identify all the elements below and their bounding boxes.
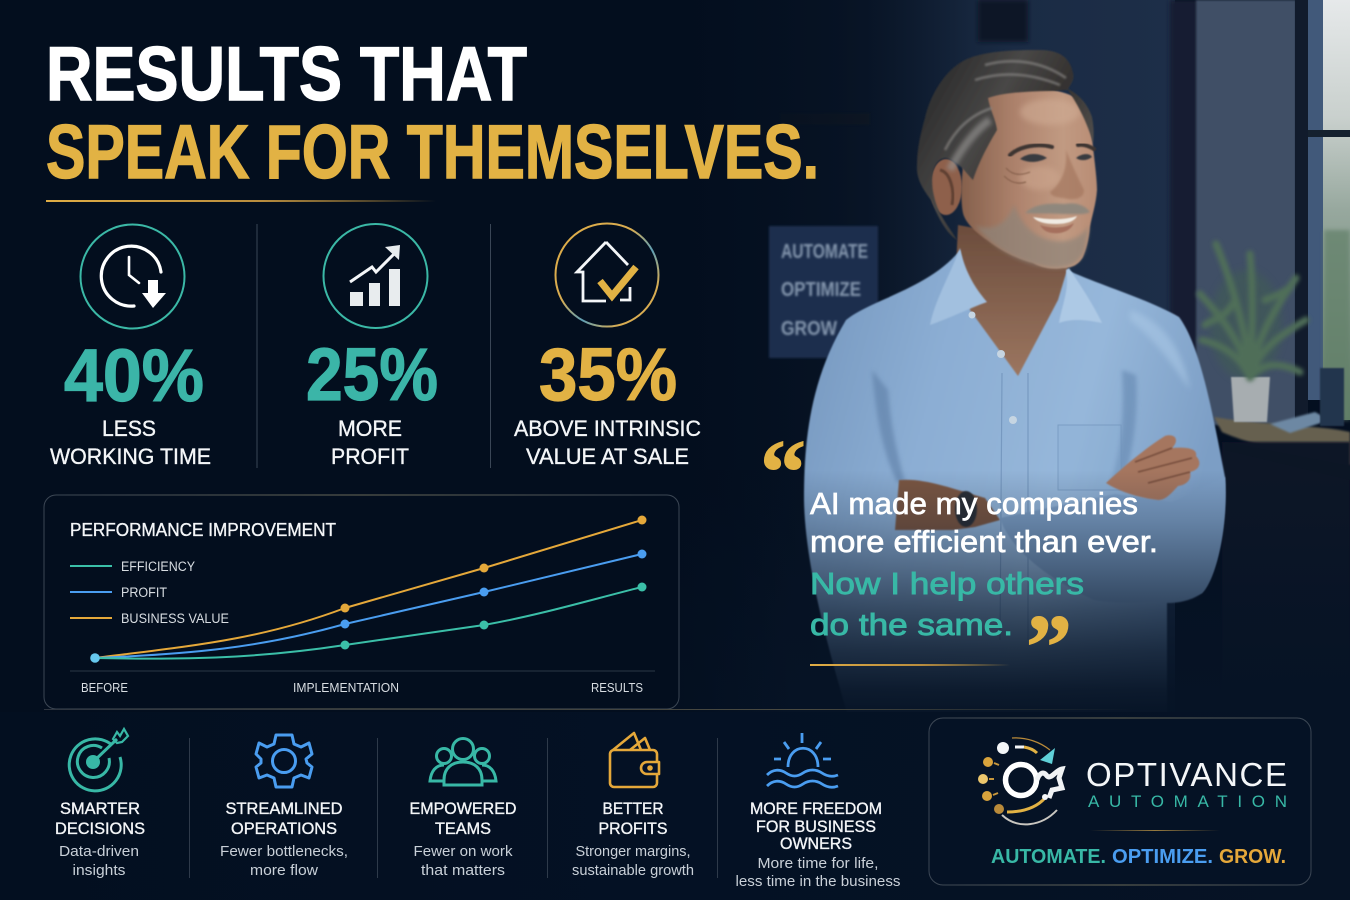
face	[961, 88, 1097, 269]
benefit: empowered teams	[410, 738, 516, 879]
shirt body	[804, 250, 1225, 722]
stat: 40% less working time: 40%	[64, 334, 204, 417]
logo mark	[978, 738, 1062, 824]
icon: house with check	[577, 242, 636, 301]
wall sign: AUTOMATE	[781, 241, 868, 263]
divider	[189, 738, 190, 878]
stat: 35% above intrinsic value: 35%	[539, 333, 677, 416]
benefit: smarter decisions: Data-driven	[59, 844, 139, 860]
opening quote mark: “	[760, 421, 806, 523]
forearm skin	[895, 480, 1000, 530]
stat divider	[256, 224, 258, 468]
panel: Optivance logo	[929, 718, 1311, 885]
stat: 35% above intrinsic value: ABOVE INTRINSIC	[514, 416, 701, 441]
closing quote mark: ”	[1026, 596, 1072, 698]
stat: 25% more profit: MORE	[338, 416, 402, 441]
collar left	[930, 248, 987, 325]
benefit: more freedom: FOR BUSINESS	[756, 817, 876, 836]
quote block	[760, 421, 1158, 698]
tagline	[991, 846, 1286, 868]
stat: 40% less working time: LESS	[102, 416, 156, 441]
benefit: more freedom: OWNERS	[780, 834, 852, 853]
tagline: AUTOMATE.	[991, 846, 1106, 868]
quote underline	[810, 664, 1010, 666]
eyebrows	[1010, 145, 1094, 155]
moustache	[1025, 203, 1090, 214]
portrait of man	[804, 50, 1225, 722]
wall sign: OPTIMIZE	[781, 279, 861, 301]
chart title: PERFORMANCE IMPROVEMENT	[70, 520, 336, 540]
benefit: more freedom: More time for life,	[758, 856, 878, 872]
ear	[930, 159, 962, 215]
line: business value	[95, 516, 646, 658]
benefit: smarter decisions: insights	[72, 863, 126, 879]
benefit: empowered teams: TEAMS	[435, 819, 491, 838]
right arm shadow	[1112, 370, 1137, 480]
benefit: better profits: Stronger margins,	[576, 844, 690, 860]
hair	[917, 50, 1094, 240]
placket	[1000, 373, 1028, 640]
eyes	[1020, 154, 1092, 162]
lower lip	[1040, 223, 1074, 233]
benefit: empowered teams: that matters	[421, 863, 505, 879]
axis labels: BEFORE	[81, 680, 128, 695]
benefit: more freedom	[736, 733, 900, 890]
horizontal separator	[44, 709, 1134, 710]
wall sign: GROW	[781, 318, 837, 340]
watch	[955, 491, 977, 527]
benefit: better profits	[572, 733, 694, 879]
smile	[1033, 216, 1077, 224]
panel: performance improvement chart	[44, 495, 679, 709]
quote text: AI made my companies	[810, 486, 1138, 521]
tagline: GROW.	[1219, 846, 1286, 868]
icon: people	[430, 738, 496, 785]
left edge blend	[640, 470, 790, 720]
icon: wallet	[610, 733, 659, 787]
stat: 40% less working time: WORKING TIME	[50, 444, 211, 469]
quote text: Now I help others	[810, 566, 1084, 601]
benefit: more freedom: less time in the business	[736, 874, 900, 890]
divider	[377, 738, 378, 878]
benefit: smarter decisions: SMARTER	[60, 799, 140, 818]
stat: 35% above intrinsic value: VALUE AT SALE	[526, 444, 689, 469]
quote text: do the same.	[810, 607, 1013, 642]
shoulder highlight	[1130, 310, 1190, 390]
benefit: better profits: sustainable growth	[572, 863, 694, 879]
axis labels	[81, 680, 643, 695]
left arm inner shadow	[872, 370, 905, 482]
benefit: more freedom: MORE FREEDOM	[750, 799, 882, 818]
logo divider	[1090, 830, 1220, 831]
title	[46, 32, 819, 195]
benefit: streamlined operations: OPERATIONS	[231, 819, 337, 838]
chart legend	[70, 559, 229, 626]
wall sign	[769, 226, 878, 358]
stat: 25% more profit	[306, 224, 438, 469]
axis labels: IMPLEMENTATION	[293, 680, 399, 695]
benefit: smarter decisions: DECISIONS	[55, 819, 145, 838]
neck	[955, 225, 1069, 378]
stat: 35% above intrinsic value	[514, 224, 701, 469]
collar right	[1059, 268, 1102, 323]
stat: 40% less working time	[50, 224, 211, 469]
chart legend: PROFIT	[121, 585, 167, 600]
panel: Optivance logo: AUTOMATION	[1088, 792, 1287, 811]
nose shadow	[1050, 150, 1084, 199]
brand name: OPTIVANCE	[1086, 756, 1287, 793]
shelf	[780, 113, 870, 125]
divider	[547, 738, 548, 878]
plant and desk	[1200, 244, 1350, 702]
title: SPEAK FOR THEMSELVES.	[46, 110, 819, 195]
shirt pocket	[1058, 425, 1121, 490]
hand	[1106, 435, 1199, 500]
beard stubble	[975, 204, 1089, 268]
quote text: more efficient than ever.	[810, 524, 1158, 559]
chart legend: BUSINESS VALUE	[121, 611, 229, 626]
line: profit	[95, 550, 646, 658]
benefit: smarter decisions	[55, 729, 145, 879]
benefit: streamlined operations: more flow	[250, 863, 319, 879]
icon: sun over water	[767, 733, 838, 787]
icon: target	[69, 729, 128, 791]
title: RESULTS THAT	[46, 32, 527, 117]
benefit: empowered teams: EMPOWERED	[410, 799, 516, 818]
hair highlights	[945, 61, 1066, 150]
tagline: OPTIMIZE.	[1112, 846, 1213, 868]
benefit: better profits: BETTER	[602, 799, 664, 818]
shirt buttons	[968, 312, 1017, 424]
chart axis	[70, 670, 655, 672]
benefit: empowered teams: Fewer on work	[414, 844, 513, 860]
forehead highlight	[1020, 99, 1080, 125]
stat: 25% more profit: 25%	[306, 333, 438, 416]
benefit: streamlined operations: Fewer bottlenecks,	[220, 844, 348, 860]
title underline	[46, 200, 436, 202]
axis labels: RESULTS	[591, 680, 643, 695]
quote text	[810, 486, 1158, 642]
lower sleeve	[1000, 477, 1225, 603]
stat divider	[490, 224, 491, 468]
chart legend: EFFICIENCY	[121, 559, 195, 574]
divider	[717, 738, 718, 878]
benefit: better profits: PROFITS	[598, 819, 668, 838]
bottom band	[0, 712, 1350, 900]
stat: 25% more profit: PROFIT	[331, 444, 409, 469]
icon: gear	[256, 735, 312, 787]
line: efficiency	[90, 582, 646, 663]
icon: rising bar chart	[350, 245, 400, 306]
benefit: streamlined operations	[220, 735, 348, 879]
bottom fade over scene	[640, 470, 1350, 720]
cheek wrinkles	[1004, 168, 1030, 183]
cheek highlight	[1020, 166, 1060, 190]
benefit: streamlined operations: STREAMLINED	[226, 799, 342, 818]
icon: clock with down arrow	[101, 246, 166, 308]
